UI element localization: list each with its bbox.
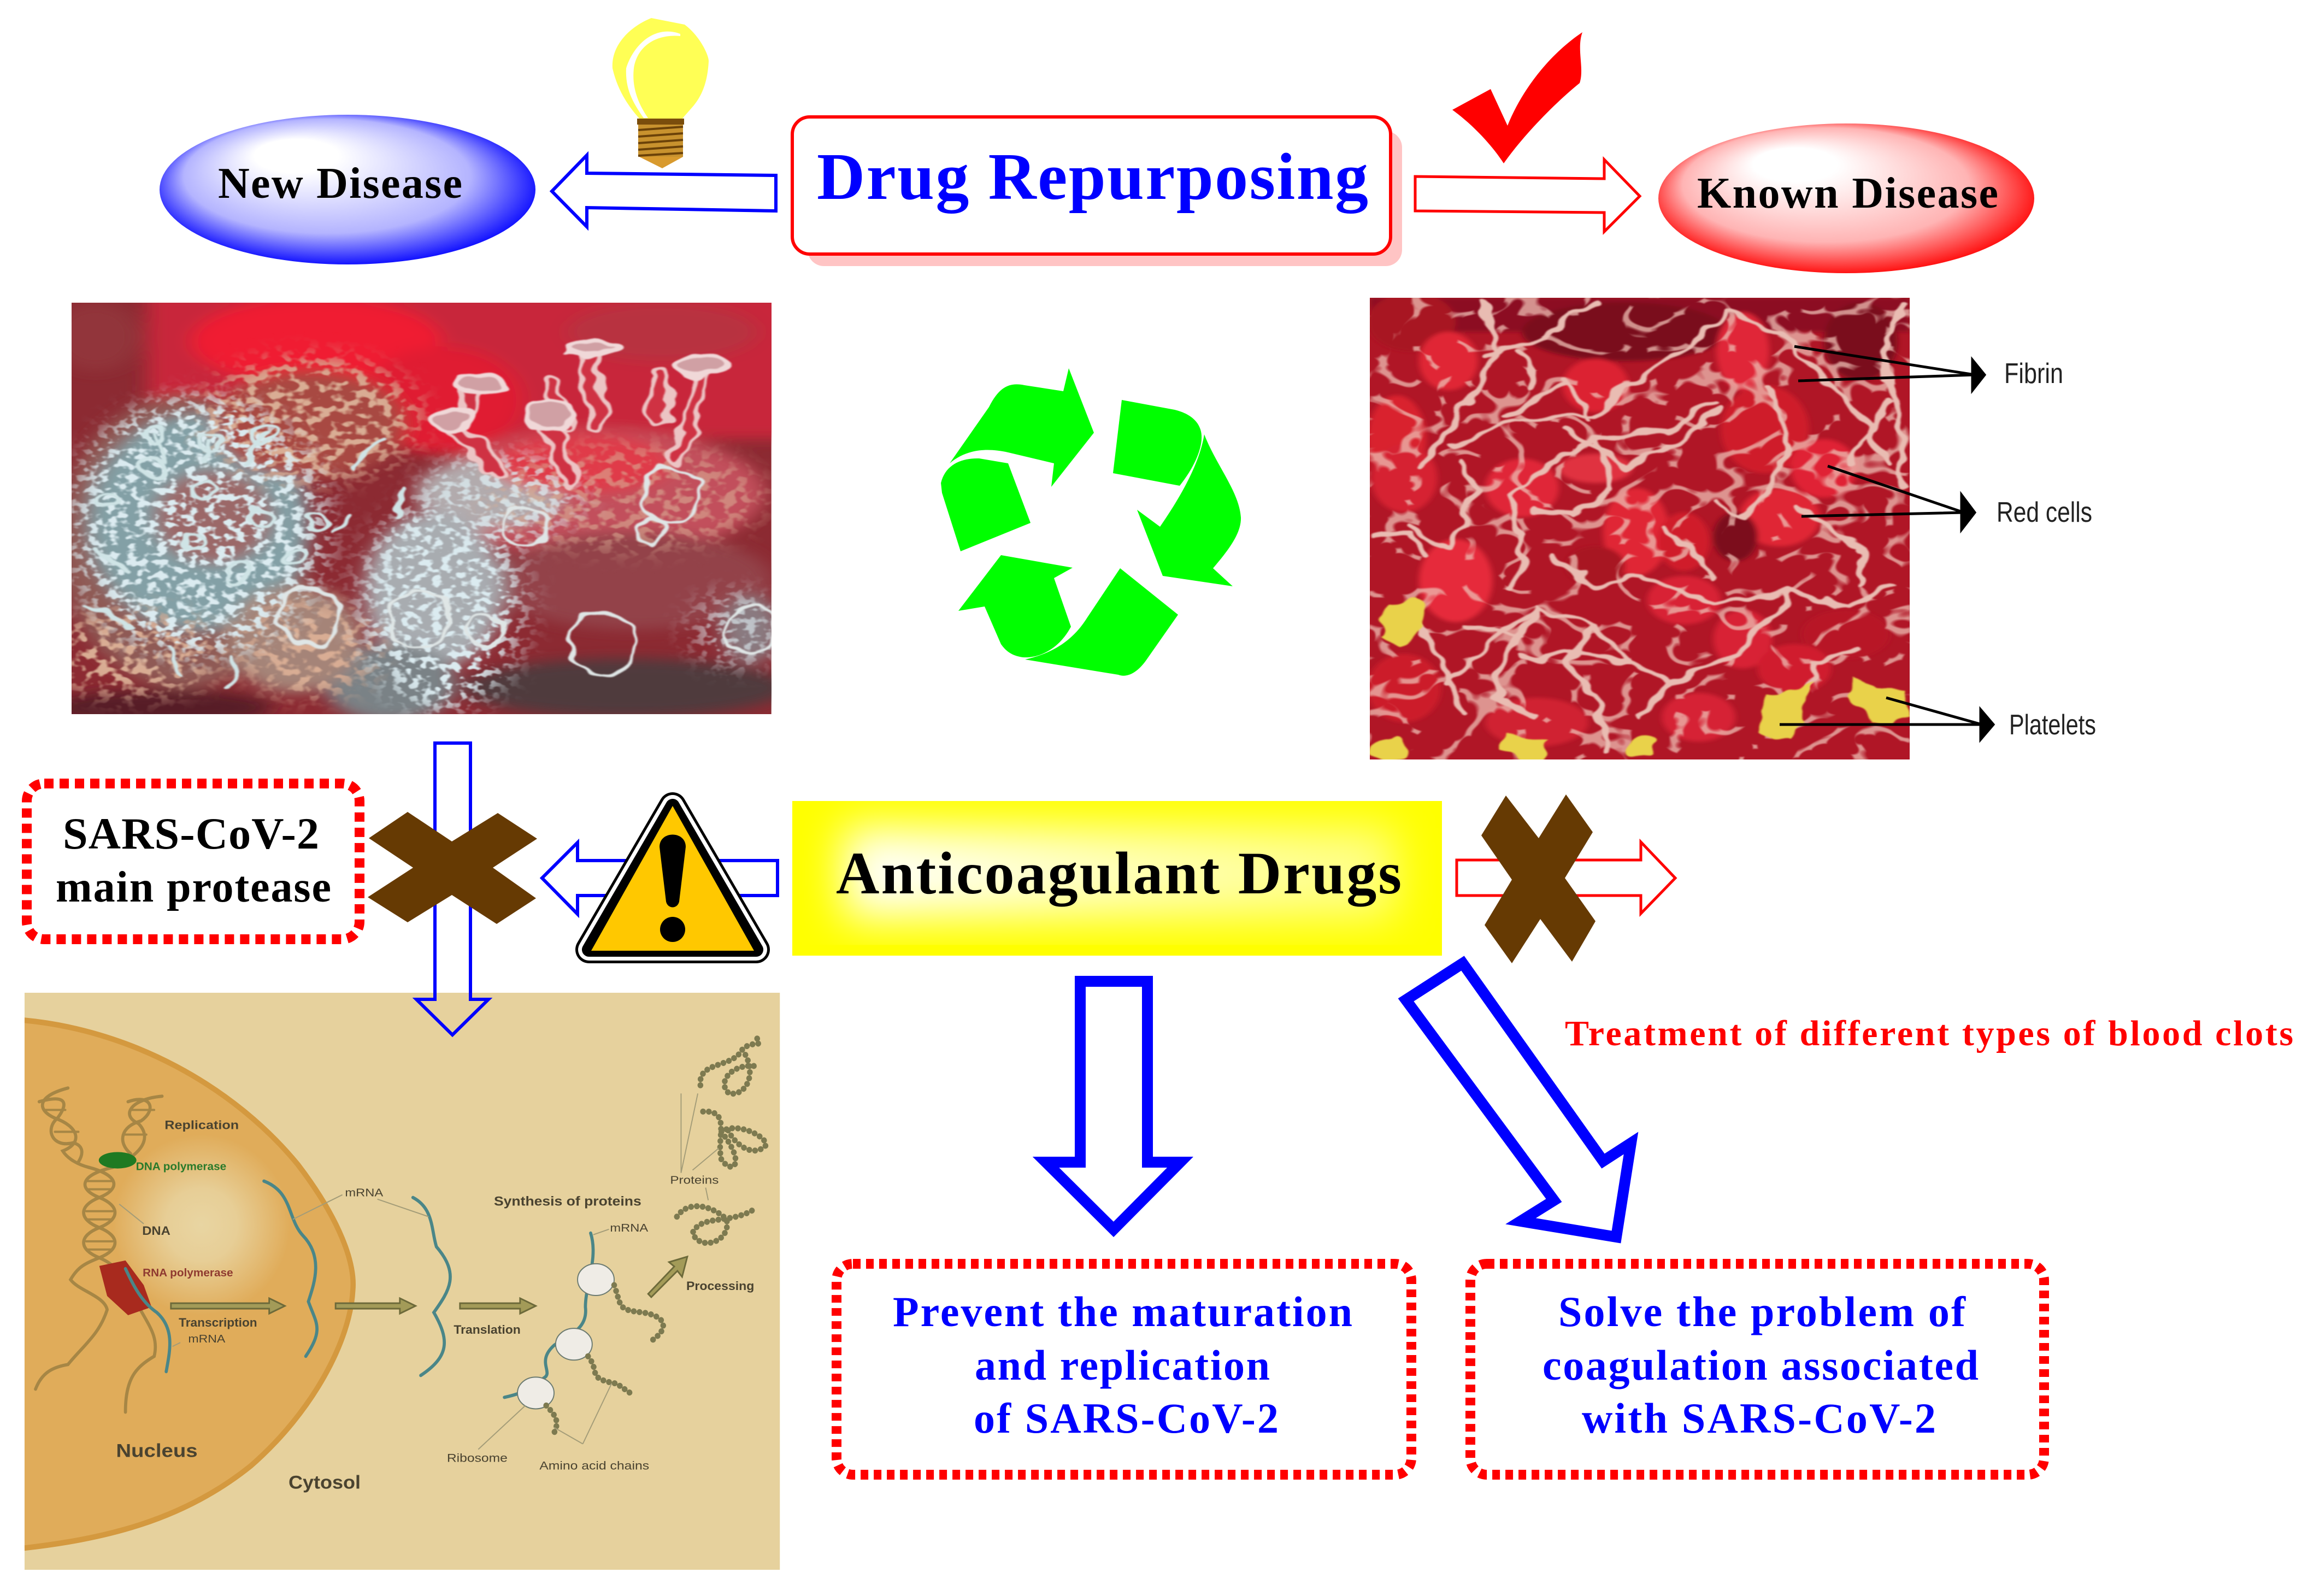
panel: drug repurposing title box [792, 117, 1402, 266]
title: Drug Repurposing [817, 140, 1368, 214]
process arrows [171, 1257, 687, 1314]
picture: blood clot [1368, 293, 1910, 766]
diagram labels [116, 1118, 754, 1493]
diagram labels: Replication [164, 1118, 239, 1132]
oval: known disease [1658, 123, 2034, 273]
diagram labels: DNA [142, 1223, 170, 1238]
diagram labels: Cytosol [288, 1473, 361, 1493]
diagram labels: Ribosome [447, 1452, 508, 1465]
callout: prevent maturation: and replication [975, 1341, 1270, 1389]
diagram labels: Proteins [670, 1174, 719, 1187]
text: treatment label: Treatment of different types of blood clots [1565, 1014, 2293, 1053]
oval: new disease: New Disease [218, 160, 462, 208]
callout: prevent maturation: Prevent the maturation [893, 1288, 1352, 1335]
arrow: big blue down [1046, 981, 1180, 1229]
labels: blood clot components: Red cells [1997, 497, 2092, 528]
panel: anticoagulant drugs [792, 801, 1442, 956]
labels: blood clot components [1780, 346, 2096, 741]
icon: light bulb [613, 18, 709, 168]
arrow: red blocked arrow [1457, 842, 1675, 914]
platelets [1368, 598, 1910, 762]
arrow: to known disease [1415, 160, 1640, 232]
callout: solve coagulation problem: Solve the problem of [1558, 1288, 1966, 1335]
diagram labels: Amino acid chains [539, 1459, 649, 1473]
callout: solve coagulation problem [1470, 1264, 2044, 1475]
oval: known disease: Known Disease [1697, 169, 1998, 217]
labels: blood clot components: Platelets [2009, 709, 2096, 741]
arrow: to new disease [552, 155, 776, 227]
diagram labels: Nucleus [116, 1441, 198, 1462]
ribosomes [517, 1264, 614, 1409]
arrows: platelets [1780, 698, 1993, 739]
fibrin strands [1368, 303, 1905, 751]
diagram labels: mRNA [610, 1222, 649, 1234]
icon: check mark [1452, 32, 1582, 163]
panel: anticoagulant drugs: Anticoagulant Drugs [836, 840, 1402, 906]
RNA polymerase [99, 1261, 151, 1315]
diagram labels: mRNA [345, 1187, 384, 1199]
callout: SARS-CoV-2 main protease: SARS-CoV-2 [63, 809, 319, 858]
panel: protein synthesis diagram [16, 993, 780, 1570]
callout: solve coagulation problem: with SARS-CoV-2 [1582, 1394, 1936, 1442]
surface texture [72, 303, 772, 714]
amino acid chains [546, 1036, 766, 1433]
diagram labels: DNA polymerase [136, 1161, 226, 1173]
callout: SARS-CoV-2 main protease: main protease [56, 863, 331, 911]
diagram labels: mRNA [188, 1333, 226, 1345]
callout: SARS-CoV-2 main protease [27, 784, 360, 939]
diagram labels: RNA polymerase [143, 1267, 233, 1279]
DNA polymerase [99, 1152, 137, 1169]
icon: brown cross right [1481, 794, 1595, 963]
icon: brown cross left [368, 812, 537, 924]
callout: solve coagulation problem: coagulation associated [1542, 1341, 1979, 1389]
diagram labels: Processing [686, 1279, 754, 1293]
mRNA strands [126, 1181, 593, 1397]
arrows: fibrin [1794, 346, 1985, 390]
arrow: blue downward through X [416, 743, 488, 1035]
icon: warning triangle [589, 806, 756, 951]
callout: prevent maturation: of SARS-CoV-2 [974, 1394, 1279, 1442]
diagram labels: Transcription [179, 1316, 257, 1329]
leader lines [119, 1093, 719, 1450]
arrow: blue left toward protease [542, 843, 778, 914]
labels: blood clot components: Fibrin [2004, 358, 2063, 390]
picture: coronavirus particles [72, 303, 772, 714]
arrows: red cells [1801, 466, 1975, 529]
oval: new disease [160, 115, 535, 264]
callout: prevent maturation [837, 1264, 1411, 1475]
spike group [449, 354, 703, 483]
fine fibrin web [1370, 298, 1910, 766]
diagram labels: Synthesis of proteins [494, 1194, 641, 1209]
DNA strands [36, 1088, 162, 1412]
icon: recycling arrows [941, 368, 1241, 676]
diagram labels: Translation [454, 1323, 521, 1336]
arrow: big blue diagonal [1406, 963, 1631, 1237]
